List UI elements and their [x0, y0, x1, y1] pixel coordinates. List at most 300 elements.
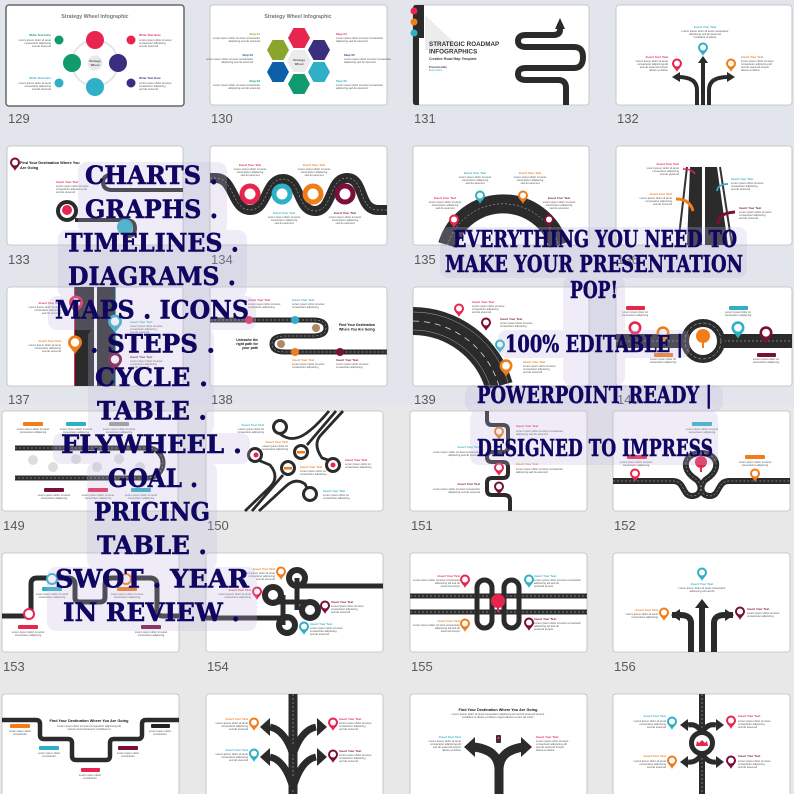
slide 132: three-way road: Insert Your Text [646, 55, 668, 59]
slide 137: straight vertical road: Lorem ipsum dolor sit amet [130, 359, 163, 363]
slide 153: stepped road: consectetur adipiscing [39, 595, 66, 599]
slide 129: strategy wheel: Lorem ipsum dolor sit amet [139, 38, 172, 42]
slide 140: roundabout: consectetur adipiscing [622, 313, 649, 317]
slide 158: four-arrow road: Insert Your Text [226, 748, 248, 752]
slide 135: arc road: sed do eiusmod [466, 181, 485, 185]
slide numbers: 155 [411, 659, 433, 674]
slide 158: four-arrow road: consectetur adipiscing [221, 755, 249, 759]
slide 154: knot road: Lorem ipsum dolor sit amet [310, 626, 343, 630]
slide 129: strategy wheel: Write Text Here [139, 33, 161, 37]
slide 155: double loop road: Lorem ipsum dolor sit amet consectetur [534, 578, 581, 582]
slide 160: roundabout with four arrows: sed do eiusmod [647, 725, 666, 729]
slide 135: arc road: consectetur adipiscing [546, 203, 573, 207]
slide 150: diagonal interchange: Insert Your Text [300, 465, 322, 469]
slide 154: knot road: Lorem ipsum dolor sit amet [243, 571, 275, 575]
slide 136: perspective road: consectetur adipiscing [739, 213, 766, 217]
slide 138: switchback road: Insert Your Text [248, 298, 270, 302]
slide numbers: 150 [207, 518, 229, 533]
slide 154: knot road: consectetur adipiscing [310, 629, 337, 633]
slide 150: diagonal interchange: consectetur adipiscing [300, 472, 327, 476]
slide 155: double loop road: adipiscing elit sed do [534, 581, 559, 585]
slide 157: valley road: Lorem ipsum dolor [38, 751, 60, 755]
slide 158: four-arrow road: consectetur adipiscing [221, 724, 249, 728]
slide 153: stepped road: Lorem ipsum dolor sit amet [111, 592, 143, 596]
slide 154: knot road: consectetur adipiscing [331, 607, 358, 611]
slide 133: destination route: sed do eiusmod [56, 190, 75, 194]
slide 135: arc road: sed do eiusmod [550, 206, 569, 210]
slide 156: three arrows road: Lorem ipsum dolor sit amet [747, 611, 780, 615]
slide 158: four-arrow road [206, 694, 383, 794]
slide 159: forked road: Lorem ipsum dolor sit amet consectetur adipiscing elit sed do eiusmod tempor [452, 712, 544, 716]
slide 132: three-way road: labore et dolore [741, 68, 760, 72]
slide 156: three arrows road: consectetur adipiscing [747, 614, 774, 618]
slide 157: valley road: Lorem ipsum dolor [9, 729, 31, 733]
slide 157: valley road: sed do eiusmod tempor incididunt ut [67, 727, 111, 731]
slide 137: straight vertical road [7, 287, 183, 386]
slide 132: three-way road [616, 5, 792, 105]
slide 154: knot road: Insert Your Text [253, 567, 275, 571]
slide 134: wave road: Lorem ipsum dolor sit amet [234, 167, 266, 171]
slide 157: valley road: consectetur [153, 732, 167, 736]
slide 129: strategy wheel: Wheel [91, 63, 100, 67]
slide 155: double loop road: Insert Your Text [438, 619, 460, 623]
slide 134: wave road: Insert Your Text [239, 163, 261, 167]
slide 138: switchback road: Insert Your Text [292, 298, 314, 302]
slide numbers: 156 [614, 659, 636, 674]
slide numbers: 140 [617, 392, 639, 407]
slide 139: curved highway: Insert Your Text [500, 317, 522, 321]
slide 130: hexagon wheel: adipiscing sed do eiusmod [336, 39, 368, 43]
slide numbers: 137 [8, 392, 30, 407]
slide 140: roundabout: Lorem ipsum dolor sit [650, 357, 676, 361]
left headline: list of slide types: MAPS . ICONS [55, 296, 249, 324]
slide 150: diagonal interchange: Insert Your Text [323, 489, 345, 493]
slide 135: arc road: Insert Your Text [464, 171, 486, 175]
slide 150: diagonal interchange: consectetur adipiscing [237, 430, 265, 434]
slide 150: diagonal interchange: Insert Your Text [242, 423, 264, 427]
slide 129: strategy wheel: consectetur adipiscing [139, 41, 166, 45]
slide 160: roundabout with four arrows: sed do eiusmod [738, 725, 757, 729]
slide 138: switchback road: consectetur adipiscing [336, 365, 363, 369]
slide 135: arc road: Lorem ipsum dolor sit amet [543, 200, 575, 204]
slide 150: diagonal interchange [206, 411, 383, 511]
slide 155: double loop road: Lorem ipsum dolor sit amet consectetur [413, 623, 460, 627]
slide 129: strategy wheel: consectetur adipiscing [139, 84, 166, 88]
slide 130: hexagon wheel: Lorem ipsum dolor sit amet consectetur [336, 36, 383, 40]
slide 158: four-arrow road: Insert Your Text [226, 717, 248, 721]
slide 138: switchback road: Unleashe the [236, 338, 258, 342]
slide 160: roundabout with four arrows: Lorem ipsum dolor sit amet [634, 719, 666, 723]
slide 135: arc road: sed do eiusmod [436, 206, 455, 210]
slide 156: three arrows road: Insert Your Text [691, 582, 713, 586]
slide 157: valley road: Lorem ipsum dolor sit amet consectetur adipiscing elit [57, 724, 121, 728]
slide 136: perspective road: sed do eiusmod [653, 202, 672, 206]
slide 150: diagonal interchange: consectetur adipiscing [345, 465, 372, 469]
slide 159: forked road: consectetur adipiscing elit [536, 742, 567, 746]
slide numbers: 132 [617, 111, 639, 126]
slide 150: diagonal interchange: consectetur adipiscing [323, 496, 350, 500]
slide 139: curved highway: consectetur adipiscing [500, 324, 527, 328]
slide 149: u-turn timeline: Lorem ipsum dolor sit amet [82, 493, 114, 497]
slide 129: strategy wheel: consectetur adipiscing [24, 41, 52, 45]
slide 129: strategy wheel: Write Text Here [29, 76, 51, 80]
slide 136: perspective road: sed do eiusmod [739, 216, 758, 220]
slide 129: strategy wheel: Lorem ipsum dolor sit amet [19, 81, 51, 85]
slide 134: wave road: sed do eiusmod [336, 221, 355, 225]
slide 152: omega road: Lorem ipsum dolor sit amet [739, 460, 771, 464]
slide 156: three arrows road: Insert Your Text [636, 608, 658, 612]
slide 160: roundabout with four arrows: consectetur adipiscing [738, 762, 765, 766]
slide 132: three-way road: Lorem ipsum dolor sit amet consectetur [681, 29, 729, 33]
slide 159: forked road: labore et dolore [442, 748, 461, 752]
slide 131: strategic roadmap cover: Enter Name [429, 69, 443, 72]
slide 130: hexagon wheel: Lorem ipsum dolor sit amet consectetur [206, 57, 253, 61]
slide 139: curved highway: Lorem ipsum dolor sit amet [523, 364, 556, 368]
slide 134: wave road: Insert Your Text [273, 211, 295, 215]
slide 139: curved highway: sed do eiusmod [472, 310, 491, 314]
slide 152: omega road: consectetur adipiscing [742, 463, 769, 467]
slide 150: diagonal interchange: consectetur adipiscing [261, 447, 289, 451]
slide 138: switchback road: consectetur adipiscing [292, 305, 319, 309]
slide 155: double loop road: adipiscing elit sed do [435, 581, 461, 585]
slide 149: u-turn timeline: consectetur adipiscing [128, 496, 155, 500]
slide 159: forked road: incididunt ut labore et dolore magna aliqua ut enim ad minim [462, 715, 535, 719]
left headline: list of slide types: IN REVIEW . [63, 598, 240, 627]
slide 137: straight vertical road: consectetur adipiscing [34, 346, 62, 350]
slide 134: wave road: sed do eiusmod [241, 173, 260, 177]
slide 156: three arrows road: consectetur adipiscing [631, 615, 659, 619]
slide 130: hexagon wheel: adipiscing sed do eiusmod [228, 86, 260, 90]
slide 134: wave road: Insert Your Text [303, 163, 325, 167]
slide 136: perspective road: Insert Your Text [657, 162, 679, 166]
slide 132: three-way road: Insert Your Text [694, 25, 716, 29]
slide 129: strategy wheel: Lorem ipsum dolor sit amet [19, 38, 51, 42]
slide 151: winding vertical road [410, 411, 587, 511]
slide 129: strategy wheel: consectetur adipiscing [24, 84, 52, 88]
slide 130: hexagon wheel: adipiscing sed do eiusmod [221, 60, 253, 64]
slide 154: knot road: sed do eiusmod [310, 632, 329, 636]
left headline: list of slide types: DIAGRAMS . [68, 262, 236, 291]
slide numbers: 149 [3, 518, 25, 533]
slide 149: u-turn timeline: Lorem ipsum dolor sit amet [38, 493, 70, 497]
slide 130: hexagon wheel: Step 04 [336, 32, 347, 36]
slide 157: valley road: Lorem ipsum dolor [79, 773, 101, 777]
slide 138: switchback road: consectetur adipiscing [248, 305, 275, 309]
slide 157: valley road: Lorem ipsum dolor [149, 729, 171, 733]
slide 155: double loop road: Insert Your Text [438, 574, 460, 578]
slide 158: four-arrow road: Lorem ipsum dolor sit amet [339, 753, 372, 757]
slide 137: straight vertical road: sed do eiusmod [42, 349, 61, 353]
slide 159: forked road: sed do eiusmod tempor [433, 745, 461, 749]
slide 132: three-way road: Insert Your Text [741, 55, 763, 59]
slide 149: u-turn timeline: Lorem ipsum dolor sit amet [125, 493, 157, 497]
slide 130: hexagon wheel: Step 02 [242, 53, 253, 57]
slide 136: perspective road: consectetur adipiscing [645, 199, 673, 203]
slide 132: three-way road: sed do eiusmod tempor [640, 65, 668, 69]
slide 153: stepped road: consectetur adipiscing [114, 595, 141, 599]
slide 140: roundabout: consectetur adipiscing [725, 313, 752, 317]
slide 140: roundabout: Lorem ipsum dolor sit [753, 357, 779, 361]
slide 134: wave road: sed do eiusmod [305, 173, 324, 177]
slide 159: forked road: Lorem ipsum dolor sit amet [536, 739, 569, 743]
slide numbers: 139 [414, 392, 436, 407]
slide 151: winding vertical road: Lorem ipsum dolor sit amet consectetur [433, 450, 480, 454]
slide 137: straight vertical road: consectetur adipiscing [130, 327, 157, 331]
slide 153: stepped road: Lorem ipsum dolor sit amet [36, 592, 68, 596]
slide 154: knot road: consectetur adipiscing [224, 595, 252, 599]
slide 151: winding vertical road: Insert Your Text [458, 482, 480, 486]
slide 129: strategy wheel: Write Text Here [139, 76, 161, 80]
slide 154: knot road: Insert Your Text [310, 622, 332, 626]
slide 160: roundabout with four arrows: sed do eiusmod [647, 765, 666, 769]
slide 130: hexagon wheel: adipiscing sed do eiusmod [228, 39, 260, 43]
left headline: list of slide types [55, 161, 249, 627]
slide 139: curved highway: Insert Your Text [472, 300, 494, 304]
slide 151: winding vertical road: Lorem ipsum dolor sit amet consectetur [433, 487, 480, 491]
slide 138: switchback road: consectetur adipiscing [292, 365, 319, 369]
slide 135: arc road: Insert Your Text [519, 171, 541, 175]
slide 157: valley road: Lorem ipsum dolor [117, 751, 139, 755]
slide 155: double loop road: eiusmod tempor [534, 627, 553, 631]
slide 136: perspective road: Insert Your Text [650, 192, 672, 196]
slide 160: roundabout with four arrows [613, 694, 790, 794]
slide 151: winding vertical road: adipiscing sed do eiusmod [448, 490, 480, 494]
slide 137: straight vertical road: consectetur adipiscing [130, 362, 157, 366]
slide 134: wave road: Insert Your Text [334, 211, 356, 215]
slide 129: strategy wheel: sed do eiusmod [32, 87, 51, 91]
slide 155: double loop road [410, 553, 587, 652]
slide 154: knot road: Lorem ipsum dolor sit amet [219, 592, 251, 596]
left headline: list of slide types: FLYWHEEL . [61, 430, 242, 459]
right headline: value proposition: 100% EDITABLE | [505, 331, 683, 358]
slide numbers: 135 [414, 252, 436, 267]
slide 156: three arrows road: Insert Your Text [747, 607, 769, 611]
slide 136: perspective road: Lorem ipsum dolor sit amet [640, 196, 672, 200]
slide 133: destination route: Are Going [20, 166, 39, 170]
slide numbers: 152 [614, 518, 636, 533]
slide 136: perspective road: Lorem ipsum dolor sit amet [647, 166, 679, 170]
slide 136: perspective road [616, 146, 792, 245]
slide 140: roundabout [616, 287, 792, 386]
slide 137: straight vertical road: consectetur adipiscing [34, 308, 62, 312]
slide 129: strategy wheel: Lorem ipsum dolor sit amet [139, 81, 172, 85]
left headline: list of slide types: SWOT . YEAR [55, 564, 249, 594]
slide 150: diagonal interchange: Lorem ipsum dolor sit [345, 462, 371, 466]
slide 135: arc road: Lorem ipsum dolor sit amet [514, 175, 546, 179]
left headline: list of slide types: GRAPHS . [85, 195, 218, 224]
slide 153: stepped road: consectetur adipiscing [15, 633, 42, 637]
slide 130: hexagon wheel: Lorem ipsum dolor sit amet consectetur [213, 36, 260, 40]
slide 160: roundabout with four arrows: Insert Your Text [644, 754, 666, 758]
slide 138: switchback road: Lorem ipsum dolor sit amet [248, 302, 281, 306]
slide 137: straight vertical road: Insert Your Text [39, 339, 61, 343]
slide 150: diagonal interchange: Insert Your Text [266, 440, 288, 444]
slide 152: omega road: consectetur adipiscing [623, 463, 650, 467]
slide numbers: 136 [617, 252, 639, 267]
slide 158: four-arrow road: consectetur adipiscing [339, 756, 366, 760]
slide 160: roundabout with four arrows: Insert Your Text [644, 714, 666, 718]
slide 134: wave road: consectetur adipiscing [332, 218, 359, 222]
slide 153: stepped road [2, 553, 179, 652]
slide 130: hexagon wheel: Strategy [293, 58, 305, 62]
slide numbers: 134 [211, 252, 233, 267]
slide 130: hexagon wheel: Lorem ipsum dolor sit amet consectetur [336, 83, 383, 87]
slide 158: four-arrow road: Lorem ipsum dolor sit amet [216, 752, 248, 756]
slide 137: straight vertical road: sed do eiusmod [130, 330, 149, 334]
slide 137: straight vertical road: Insert Your Text [39, 301, 61, 305]
slide 138: switchback road: Lorem ipsum dolor sit amet [336, 362, 369, 366]
slide 159: forked road [410, 694, 587, 794]
slide 155: double loop road: Insert Your Text [534, 574, 556, 578]
slide 129: strategy wheel: sed do eiusmod [139, 44, 158, 48]
slide 137: straight vertical road: sed do eiusmod [42, 311, 61, 315]
slide 133: destination route [7, 146, 183, 245]
slide numbers: 130 [211, 111, 233, 126]
slide 135: arc road: consectetur adipiscing [432, 203, 459, 207]
slide 159: forked road: Insert Your Text [439, 735, 461, 739]
slide 130: hexagon wheel: adipiscing sed do eiusmod [344, 60, 376, 64]
slide 158: four-arrow road: sed do eiusmod [229, 727, 248, 731]
right headline: value proposition [445, 226, 743, 462]
slide 160: roundabout with four arrows: Lorem ipsum dolor sit amet [738, 759, 771, 763]
slide 151: winding vertical road: Lorem ipsum dolor sit amet consectetur [516, 429, 563, 433]
slide 133: destination route: Lorem ipsum dolor sit amet [56, 184, 89, 188]
slide 135: arc road: Insert Your Text [548, 196, 570, 200]
slide 131: strategic roadmap cover: Presented By [429, 65, 447, 69]
slide 130: hexagon wheel: Step 05 [344, 53, 355, 57]
slide 157: valley road: Find Your Destination Where You Are Going [50, 719, 129, 723]
slide 149: u-turn timeline: Lorem ipsum dolor sit amet [17, 427, 49, 431]
slide 160: roundabout with four arrows: Lorem ipsum dolor sit amet [634, 759, 666, 763]
slide 132: three-way road: consectetur adipiscing elit [637, 62, 668, 66]
slide 152: omega road: Lorem ipsum dolor sit amet [686, 427, 718, 431]
slide 155: double loop road: adipiscing elit sed do [534, 624, 559, 628]
slide 157: valley road: consectetur [83, 776, 97, 780]
slide 140: roundabout: Lorem ipsum dolor sit [622, 310, 648, 314]
slide 129: strategy wheel: sed do eiusmod [32, 44, 51, 48]
slide 155: double loop road: adipiscing elit sed do [435, 626, 461, 630]
slide 154: knot road: Lorem ipsum dolor sit amet [331, 604, 364, 608]
slide 131: strategic roadmap cover [410, 5, 589, 105]
slide 136: perspective road: sed do eiusmod [731, 187, 750, 191]
slide 155: double loop road: eiusmod tempor [441, 584, 460, 588]
slide 136: perspective road: consectetur adipiscing [731, 184, 758, 188]
slide 140: roundabout: consectetur adipiscing [753, 360, 780, 364]
slide 133: destination route: consectetur adipiscing elit [56, 187, 87, 191]
slide 158: four-arrow road: Lorem ipsum dolor sit amet [216, 721, 248, 725]
slide numbers: 133 [8, 252, 30, 267]
slide 160: roundabout with four arrows: consectetur adipiscing [738, 722, 765, 726]
slide 130: hexagon wheel: adipiscing sed do eiusmod [336, 86, 368, 90]
slide 132: three-way road: incididunt ut labore [694, 35, 717, 39]
slide 139: curved highway: Lorem ipsum dolor sit amet [472, 304, 505, 308]
slide numbers: 138 [211, 392, 233, 407]
slide 154: knot road: sed do eiusmod [331, 610, 350, 614]
right headline: value proposition: POP! [570, 277, 618, 304]
left headline: list of slide types: PRICING [94, 498, 210, 526]
slide 140: roundabout: consectetur adipiscing [650, 360, 677, 364]
slide 132: three-way road: labore et dolore [649, 68, 668, 72]
slide 138: switchback road: your path [242, 346, 258, 350]
slide 129: strategy wheel: Strategy [89, 59, 101, 63]
slide 160: roundabout with four arrows: Insert Your Text [738, 714, 760, 718]
slide 136: perspective road: Insert Your Text [739, 206, 761, 210]
slide 138: switchback road: Insert Your Text [292, 358, 314, 362]
slide 134: wave road: Lorem ipsum dolor sit amet [268, 215, 300, 219]
slide 156: three arrows road: Lorem ipsum dolor sit amet consectetur [678, 586, 726, 590]
slide 160: roundabout with four arrows: Insert Your Text [738, 754, 760, 758]
slide numbers: 153 [3, 659, 25, 674]
left headline: list of slide types: TABLE . [97, 396, 207, 426]
slide 134: wave road: consectetur adipiscing [271, 218, 298, 222]
slide 157: valley road: consectetur [13, 732, 27, 736]
slide 139: curved highway: sed do eiusmod [523, 370, 542, 374]
slide 133: destination route: Insert Your Text [56, 180, 78, 184]
slide 159: forked road: Lorem ipsum dolor sit amet [429, 739, 461, 743]
slide 130: hexagon wheel: Lorem ipsum dolor sit amet consectetur [344, 57, 391, 61]
slide 131: strategic roadmap cover: STRATEGIC ROADMAP [429, 41, 499, 48]
slide 149: u-turn timeline: Lorem ipsum dolor sit amet [103, 427, 135, 431]
slide 154: knot road: consectetur adipiscing [248, 574, 276, 578]
slide 151: winding vertical road: Insert Your Text [516, 424, 538, 428]
slide 156: three arrows road: Lorem ipsum dolor sit amet [626, 612, 658, 616]
slide 137: straight vertical road: Insert Your Text [130, 355, 152, 359]
slide 158: four-arrow road: Insert Your Text [339, 749, 361, 753]
slide numbers: 129 [8, 111, 30, 126]
slide 139: curved highway: consectetur adipiscing [472, 307, 499, 311]
slide 137: straight vertical road: Lorem ipsum dolor sit amet [29, 343, 61, 347]
slide 159: forked road: labore et dolore [536, 748, 555, 752]
slide 154: knot road: Insert Your Text [229, 588, 251, 592]
slide 130: hexagon wheel [206, 5, 391, 105]
slide 135: arc road: Lorem ipsum dolor sit amet [429, 200, 461, 204]
slide 158: four-arrow road: sed do eiusmod [339, 759, 358, 763]
slide 159: forked road: sed do eiusmod tempor [536, 745, 564, 749]
slide 152: omega road: consectetur adipiscing [689, 430, 716, 434]
slide 134: wave road: Lorem ipsum dolor sit amet [298, 167, 330, 171]
slide 153: stepped road: Lorem ipsum dolor sit amet [12, 630, 44, 634]
slide 155: double loop road: Lorem ipsum dolor sit amet consectetur [413, 578, 460, 582]
slide 135: arc road: sed do eiusmod [521, 181, 540, 185]
slide 134: wave road [210, 146, 387, 245]
slide 155: double loop road: eiusmod tempor [534, 584, 553, 588]
slide 129: strategy wheel [6, 5, 184, 106]
slide 138: switchback road: Lorem ipsum dolor sit amet [292, 302, 325, 306]
slide 139: curved highway: Insert Your Text [523, 360, 545, 364]
slide 158: four-arrow road: Insert Your Text [339, 717, 361, 721]
slide 131: strategic roadmap cover: Creative Road Map Template [429, 57, 477, 61]
slide 160: roundabout with four arrows: consectetur adipiscing [639, 722, 667, 726]
slide 151: winding vertical road: Lorem ipsum dolor sit amet consectetur [516, 467, 563, 471]
slide 158: four-arrow road: Lorem ipsum dolor sit amet [339, 721, 372, 725]
slide 139: curved highway: Lorem ipsum dolor sit amet [500, 321, 533, 325]
slide 151: winding vertical road: Insert Your Text [516, 462, 538, 466]
slide 132: three-way road: Lorem ipsum dolor sit amet [741, 59, 774, 63]
slide 129: strategy wheel: sed do eiusmod [139, 87, 158, 91]
slide 130: hexagon wheel: Lorem ipsum dolor sit amet consectetur [213, 83, 260, 87]
slide 140: roundabout: Lorem ipsum dolor sit [725, 310, 751, 314]
slide 149: u-turn timeline: Lorem ipsum dolor sit amet [60, 427, 92, 431]
slide 155: double loop road: Insert Your Text [534, 617, 556, 621]
slide 137: straight vertical road: Lorem ipsum dolor sit amet [130, 324, 163, 328]
slide 160: roundabout with four arrows: sed do eiusmod [738, 765, 757, 769]
slide 149: u-turn timeline: consectetur adipiscing [41, 496, 68, 500]
slide 136: perspective road: Lorem ipsum dolor sit amet [731, 181, 764, 185]
slide 138: switchback road: Where You Are Going [339, 328, 375, 332]
slide 160: roundabout with four arrows: Lorem ipsum dolor sit amet [738, 719, 771, 723]
left headline: list of slide types: CYCLE . [95, 363, 208, 392]
slide 138: switchback road [210, 287, 387, 386]
